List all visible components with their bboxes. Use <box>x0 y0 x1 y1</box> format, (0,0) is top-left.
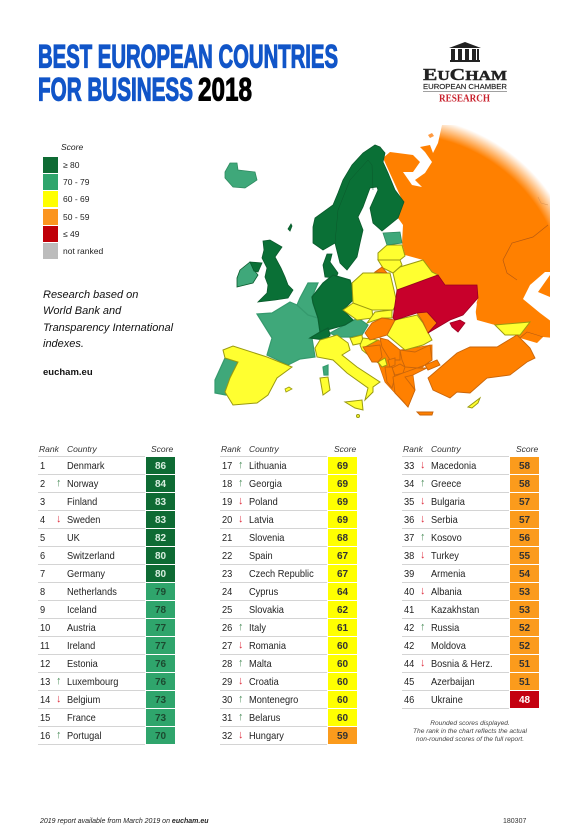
row: Poland: 69 <box>337 497 348 508</box>
row: Sweden: ↓ <box>56 513 62 525</box>
row: Hungary: Hungary <box>249 730 284 742</box>
row: Azerbaijan: 51 <box>519 677 530 688</box>
row: Italy: ↑ <box>238 621 244 633</box>
row: Poland: ↓ <box>238 495 244 507</box>
row: Malta: ↑ <box>238 657 244 669</box>
row: Belarus: 60 <box>337 713 348 724</box>
row: Latvia: Latvia <box>249 514 274 526</box>
row: UK: 5 <box>40 532 45 544</box>
row: Portugal <box>38 727 175 744</box>
row: Romania: Romania <box>249 640 286 652</box>
footer: code: 180307 <box>503 818 526 825</box>
row: Moldova: Moldova <box>431 640 466 652</box>
row: Finland: Finland <box>67 496 97 508</box>
row: UK: 82 <box>155 533 166 544</box>
logo: EuCham research: RESEARCH <box>439 94 490 104</box>
row: Ireland <box>38 637 175 654</box>
row: Slovenia: 68 <box>337 533 348 544</box>
footnote: Rounded scores displayed. <box>430 720 510 727</box>
row: Montenegro: Montenegro <box>249 694 298 706</box>
row: Netherlands: 8 <box>40 586 45 598</box>
title: FOR BUSINESS <box>38 72 193 108</box>
row: Luxembourg: ↑ <box>56 675 62 687</box>
row: Albania: 53 <box>519 587 530 598</box>
row: Poland <box>220 493 358 510</box>
row: Czech Republic: 67 <box>337 569 348 580</box>
row: Belarus: 31 <box>222 712 232 724</box>
row: Hungary <box>220 727 358 744</box>
logo: EuCham research: EUCHAM <box>423 65 507 84</box>
row: Latvia <box>220 511 358 528</box>
row: Netherlands: Netherlands <box>67 586 117 598</box>
row: Poland: Poland <box>249 496 278 508</box>
row: Bosnia & Herz.: ↓ <box>420 657 426 669</box>
row: Romania: 27 <box>222 640 232 652</box>
row: Azerbaijan: 45 <box>404 676 414 688</box>
table header: Rank <box>403 444 423 454</box>
Caspian Sea <box>523 272 552 322</box>
row: Austria <box>38 619 175 636</box>
Balearic islands <box>285 387 292 392</box>
row: Georgia <box>220 475 358 492</box>
row: Turkey: ↓ <box>420 549 426 561</box>
row: Lithuania: Lithuania <box>249 460 287 472</box>
row: Cyprus: 24 <box>222 586 232 598</box>
row: Kosovo: 37 <box>404 532 414 544</box>
row: Greece <box>402 475 539 492</box>
row: Kosovo: ↑ <box>420 531 426 543</box>
title <box>38 38 338 108</box>
row: Lithuania: 17 <box>222 460 232 472</box>
row: Portugal: 70 <box>155 731 166 742</box>
row: Finland <box>38 493 175 510</box>
row: Germany: 80 <box>155 569 166 580</box>
row: Croatia: ↓ <box>238 675 244 687</box>
row: Ukraine: 46 <box>404 694 414 706</box>
title: 2018 <box>198 72 252 108</box>
row: Moldova: 42 <box>404 640 414 652</box>
row: Moldova <box>402 637 539 654</box>
row: Estonia: 76 <box>155 659 166 670</box>
row: Iceland: 9 <box>40 604 45 616</box>
footnote: non-rounded scores of the full report. <box>416 736 524 743</box>
row: Turkey: 55 <box>519 551 530 562</box>
row: Moldova: 52 <box>519 641 530 652</box>
table header: Country <box>431 444 461 454</box>
text block: research note: Transparency International <box>43 322 173 334</box>
row: Albania: Albania <box>431 586 462 598</box>
row: Ireland: 77 <box>155 641 166 652</box>
row: Italy: 26 <box>222 622 232 634</box>
row: Georgia: 18 <box>222 478 232 490</box>
row: Iceland: Iceland <box>67 604 97 616</box>
Russia and Kazakhstan <box>384 125 550 343</box>
row: UK <box>38 529 175 546</box>
row: Slovenia <box>220 529 358 546</box>
logo: EuCham research <box>423 42 508 104</box>
row: Sweden <box>38 511 175 528</box>
row: Ireland: 11 <box>40 640 50 652</box>
row: Norway <box>38 475 175 492</box>
row: Greece: ↑ <box>420 477 426 489</box>
footnote: The rank in the chart reflects the actual <box>413 728 527 735</box>
legend <box>43 142 103 259</box>
row: Turkey: 38 <box>404 550 414 562</box>
row: Kazakhstan <box>402 601 539 618</box>
row: Austria: 77 <box>155 623 166 634</box>
footer: report note: 2019 report available from March 2019 on eucham.eu <box>40 818 208 825</box>
row: Luxembourg: Luxembourg <box>67 676 118 688</box>
row: Cyprus <box>220 583 358 600</box>
row: Ukraine: Ukraine <box>431 694 463 706</box>
ranking table: column 3 <box>402 444 539 709</box>
row: Kosovo: Kosovo <box>431 532 462 544</box>
row: Greece: 58 <box>519 479 530 490</box>
row: Czech Republic: Czech Republic <box>249 568 314 580</box>
row: Slovenia: 21 <box>222 532 232 544</box>
row: Portugal: ↑ <box>56 729 62 741</box>
row: Switzerland <box>38 547 175 564</box>
row: France: France <box>67 712 96 724</box>
row: Lithuania: 69 <box>337 461 348 472</box>
row: Belgium: Belgium <box>67 694 100 706</box>
row: Ireland: Ireland <box>67 640 95 652</box>
row: Armenia: 39 <box>404 568 414 580</box>
row: Iceland: 78 <box>155 605 166 616</box>
row: Malta: Malta <box>249 658 272 670</box>
row: Czech Republic <box>220 565 358 582</box>
row: Czech Republic: 23 <box>222 568 232 580</box>
row: Finland: 3 <box>40 496 45 508</box>
row: Hungary: 32 <box>222 730 232 742</box>
row: Switzerland: 80 <box>155 551 166 562</box>
row: Bulgaria: 57 <box>519 497 530 508</box>
row: Belgium: ↓ <box>56 693 62 705</box>
legend: 60 - 69 <box>63 194 89 204</box>
row: Albania: ↓ <box>420 585 426 597</box>
row: Lithuania: ↑ <box>238 459 244 471</box>
row: Germany <box>38 565 175 582</box>
row: Cyprus: Cyprus <box>249 586 278 598</box>
row: Macedonia: Macedonia <box>431 460 476 472</box>
UK and Ireland <box>237 240 293 302</box>
row: Macedonia: ↓ <box>420 459 426 471</box>
row: Austria: Austria <box>67 622 96 634</box>
row: Luxembourg: 13 <box>40 676 50 688</box>
row: France: 15 <box>40 712 50 724</box>
table header: Rank <box>39 444 59 454</box>
row: Portugal: Portugal <box>67 730 101 742</box>
row: Austria: 10 <box>40 622 50 634</box>
row: Italy <box>220 619 358 636</box>
row: Greece: 34 <box>404 478 414 490</box>
row: Croatia <box>220 673 358 690</box>
row: Macedonia: 58 <box>519 461 530 472</box>
row: Hungary: 59 <box>337 731 348 742</box>
row: Azerbaijan <box>402 673 539 690</box>
legend: ≥ 80 <box>63 160 79 170</box>
row: Latvia: 69 <box>337 515 348 526</box>
row: Slovakia: 25 <box>222 604 232 616</box>
row: Bulgaria: 35 <box>404 496 414 508</box>
row: Russia: 52 <box>519 623 530 634</box>
row: Montenegro: 60 <box>337 695 348 706</box>
Azov Sea <box>462 303 477 322</box>
table header: Rank <box>221 444 241 454</box>
footnote <box>413 720 528 743</box>
table header: Score <box>151 444 173 454</box>
row: Latvia: ↓ <box>238 513 244 525</box>
Germany and Switzerland <box>310 275 355 340</box>
row: Hungary: ↓ <box>238 729 244 741</box>
row: Norway: 2 <box>40 478 45 490</box>
text block: research note: indexes. <box>43 338 84 350</box>
row: Kosovo <box>402 529 539 546</box>
table header <box>38 441 175 457</box>
row: Portugal: 16 <box>40 730 50 742</box>
row: Serbia: ↓ <box>420 513 426 525</box>
row: Luxembourg <box>38 673 175 690</box>
row: Slovakia <box>220 601 358 618</box>
logo: EuCham research: EUROPEAN CHAMBER <box>423 82 508 91</box>
row: Slovakia: Slovakia <box>249 604 284 616</box>
row: Ukraine: 48 <box>519 695 530 706</box>
ranking table: column 2 <box>220 444 357 745</box>
table header <box>402 441 539 457</box>
row: Finland: 83 <box>155 497 166 508</box>
row: Kosovo: 56 <box>519 533 530 544</box>
text block: research note: Research based on <box>43 289 138 301</box>
row: Luxembourg: 76 <box>155 677 166 688</box>
row: Denmark <box>38 457 175 474</box>
table header <box>220 441 358 457</box>
row: Armenia: Armenia <box>431 568 465 580</box>
row: Slovakia: 62 <box>337 605 348 616</box>
row: Serbia: 57 <box>519 515 530 526</box>
row: Norway: Norway <box>67 478 98 490</box>
row: Armenia <box>402 565 539 582</box>
row: Denmark: 86 <box>155 461 166 472</box>
row: Serbia: 36 <box>404 514 414 526</box>
row: Estonia: 12 <box>40 658 50 670</box>
row: Belgium: 14 <box>40 694 50 706</box>
row: Bulgaria: ↓ <box>420 495 426 507</box>
Iceland <box>225 163 257 188</box>
map of Europe <box>214 125 550 418</box>
row: Lithuania <box>220 457 358 474</box>
row: Estonia <box>38 655 175 672</box>
row: Belgium: 73 <box>155 695 166 706</box>
row: Slovenia: Slovenia <box>249 532 284 544</box>
row: Georgia: Georgia <box>249 478 282 490</box>
row: Belarus <box>220 709 358 726</box>
row: Albania <box>402 583 539 600</box>
row: Germany: Germany <box>67 568 105 580</box>
row: Turkey <box>402 547 539 564</box>
row: Sweden: 83 <box>155 515 166 526</box>
row: Romania: ↓ <box>238 639 244 651</box>
row: Croatia: 60 <box>337 677 348 688</box>
row: Malta: 28 <box>222 658 232 670</box>
row: Norway: 84 <box>155 479 166 490</box>
table header: Score <box>516 444 538 454</box>
row: Estonia: Estonia <box>67 658 98 670</box>
row: Russia: Russia <box>431 622 459 634</box>
legend: Score <box>61 142 83 152</box>
Orange countries in the Balkans and Turkey <box>363 267 535 415</box>
row: Belarus: Belarus <box>249 712 280 724</box>
row: Turkey: Turkey <box>431 550 459 562</box>
row: Sweden: Sweden <box>67 514 100 526</box>
row: Malta: 60 <box>337 659 348 670</box>
row: Belgium <box>38 691 175 708</box>
row: Croatia: Croatia <box>249 676 279 688</box>
row: Kazakhstan: 41 <box>404 604 414 616</box>
Western Europe <box>215 283 368 395</box>
row: Netherlands <box>38 583 175 600</box>
row: Bosnia & Herz.: 51 <box>519 659 530 670</box>
row: Macedonia: 33 <box>404 460 414 472</box>
row: Bosnia & Herz.: 44 <box>404 658 414 670</box>
row: Croatia: 29 <box>222 676 232 688</box>
table header: Score <box>334 444 356 454</box>
icon: building <box>449 42 481 62</box>
row: Montenegro <box>220 691 358 708</box>
row: Netherlands: 79 <box>155 587 166 598</box>
row: Russia: 42 <box>404 622 414 634</box>
row: Switzerland: 6 <box>40 550 45 562</box>
row: Latvia: 20 <box>222 514 232 526</box>
row: Russia: ↑ <box>420 621 426 633</box>
table header: Country <box>249 444 279 454</box>
row: Cyprus: 64 <box>337 587 348 598</box>
row: Russia <box>402 619 539 636</box>
row: Georgia: ↑ <box>238 477 244 489</box>
row: Montenegro: 30 <box>222 694 232 706</box>
ranking table: column 1 <box>38 444 175 745</box>
row: Germany: 7 <box>40 568 45 580</box>
row: Spain: Spain <box>249 550 273 562</box>
row: Italy: Italy <box>249 622 266 634</box>
legend: not ranked <box>63 246 103 256</box>
text block: research note <box>43 289 174 350</box>
row: Macedonia <box>402 457 539 474</box>
row: Belarus: ↑ <box>238 711 244 723</box>
Balkan land underlay <box>365 340 432 407</box>
row: Bosnia & Herz. <box>402 655 539 672</box>
row: Romania <box>220 637 358 654</box>
row: Romania: 60 <box>337 641 348 652</box>
row: Spain <box>220 547 358 564</box>
row: Serbia: Serbia <box>431 514 458 526</box>
legend: 70 - 79 <box>63 177 89 187</box>
row: Iceland <box>38 601 175 618</box>
Estonia <box>383 232 402 245</box>
row: Bulgaria: Bulgaria <box>431 496 465 508</box>
row: France <box>38 709 175 726</box>
row: UK: UK <box>67 532 80 544</box>
table header: Country <box>67 444 97 454</box>
row: Poland: 19 <box>222 496 232 508</box>
row: Bulgaria <box>402 493 539 510</box>
text block: website: eucham.eu <box>43 367 93 378</box>
row: Ukraine <box>402 691 539 708</box>
row: Sweden: 4 <box>40 514 45 526</box>
Yellow countries <box>223 245 530 418</box>
Ukraine <box>393 275 478 333</box>
row: Azerbaijan: Azerbaijan <box>431 676 475 688</box>
row: Bosnia & Herz.: Bosnia & Herz. <box>431 658 493 670</box>
row: Montenegro: ↑ <box>238 693 244 705</box>
row: Kazakhstan: Kazakhstan <box>431 604 479 616</box>
row: Spain: 22 <box>222 550 232 562</box>
row: Greece: Greece <box>431 478 461 490</box>
row: Italy: 61 <box>337 623 348 634</box>
legend: 50 - 59 <box>63 212 89 222</box>
row: Albania: 40 <box>404 586 414 598</box>
row: Norway: ↑ <box>56 477 62 489</box>
legend: ≤ 49 <box>63 229 79 239</box>
row: Serbia <box>402 511 539 528</box>
row: Kazakhstan: 53 <box>519 605 530 616</box>
row: Denmark: 1 <box>40 460 45 472</box>
row: Malta <box>220 655 358 672</box>
row: Armenia: 54 <box>519 569 530 580</box>
row: Georgia: 69 <box>337 479 348 490</box>
row: Spain: 67 <box>337 551 348 562</box>
row: France: 73 <box>155 713 166 724</box>
Nordics <box>288 145 404 278</box>
row: Switzerland: Switzerland <box>67 550 115 562</box>
row: Denmark: Denmark <box>67 460 104 472</box>
text block: research note: World Bank and <box>43 305 121 317</box>
